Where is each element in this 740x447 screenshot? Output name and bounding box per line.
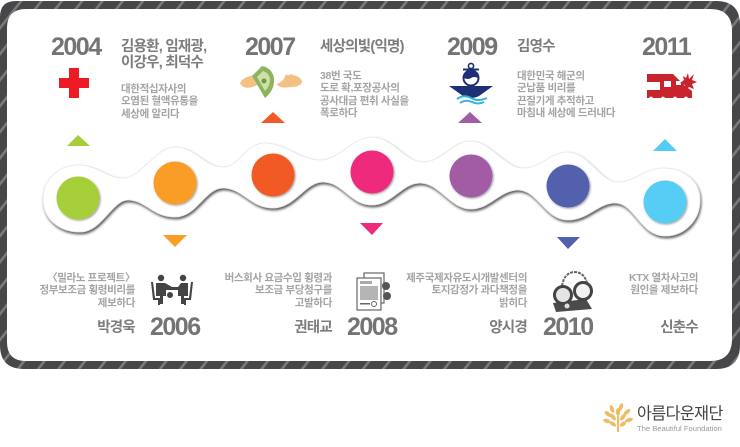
name 2010: 양시경	[489, 320, 527, 336]
name 2004	[121, 38, 206, 71]
description 2004: 오염된 혈액유통을	[121, 95, 198, 107]
description 2010: 토지감정가 과다책정을	[431, 284, 527, 296]
description 2006: 정부보조금 횡령비리를	[39, 284, 135, 296]
marker 2011	[653, 139, 677, 151]
description 2010: 제주국제자유도시개발센터의	[406, 272, 527, 284]
description 2006: 〈밀라노 프로젝트〉	[47, 272, 135, 284]
description 2007: 폭로하다	[320, 107, 357, 119]
description 2007: 공사대금 편취 사실을	[320, 95, 409, 107]
marker 2009	[458, 112, 482, 123]
marker 2006	[163, 235, 187, 247]
name 2007: 세상의빛(익명)	[320, 39, 404, 55]
year 2009: 2009	[447, 33, 497, 61]
year 2011: 2011	[642, 33, 690, 61]
icon: red cross	[59, 68, 89, 98]
marker 2008	[360, 223, 383, 235]
name 2004: 김용환, 임재광,	[121, 39, 206, 55]
description 2006: 제보하다	[98, 297, 135, 309]
circle 2010	[546, 164, 590, 208]
icon: navy anchor	[449, 63, 493, 104]
description 2008: 버스회사 요금수입 횡령과	[225, 272, 332, 284]
description 2004: 대한적십자사의	[121, 83, 186, 95]
description 2008: 보조금 부당청구를	[255, 284, 332, 296]
name 2004: 이강우, 최덕수	[121, 55, 203, 71]
name 2006: 박경욱	[97, 320, 135, 336]
description 2007: 도로 확,포장공사의	[320, 82, 400, 94]
year 2004: 2004	[51, 33, 101, 61]
description 2009: 군납품 비리를	[517, 82, 575, 94]
logo: foundation name: 아름다운재단	[637, 405, 723, 423]
year 2008: 2008	[347, 313, 397, 341]
name 2008: 권태교	[294, 320, 332, 336]
description 2004: 세상에 알리다	[121, 108, 179, 120]
marker 2004	[67, 135, 90, 146]
circle 2008	[350, 150, 394, 194]
description 2011	[629, 272, 698, 296]
description 2004	[121, 83, 198, 120]
marker 2010	[557, 237, 580, 249]
description 2010	[406, 272, 528, 309]
circle 2006	[154, 162, 196, 204]
description 2009: 마침내 세상에 드러내다	[517, 107, 615, 119]
circle 2009	[450, 154, 492, 198]
marker 2007	[261, 112, 285, 123]
wavy timeline band	[43, 137, 700, 236]
description 2007: 38번 국도	[320, 70, 361, 82]
icon: crashing train	[647, 73, 697, 98]
icon: documents with seals	[357, 273, 391, 310]
description 2011: 원인을 제보하다	[630, 284, 698, 296]
icon: money fan and hands	[240, 66, 302, 98]
circle 2007	[252, 154, 294, 196]
logo: english name: The Beautiful Foundation	[637, 424, 722, 433]
circle 2004	[56, 176, 100, 220]
description 2009: 대한민국 해군의	[517, 70, 585, 82]
description 2009	[517, 70, 616, 119]
description 2010: 밝히다	[499, 297, 527, 309]
name 2009: 김영수	[517, 39, 555, 55]
description 2011: KTX 열차사고의	[629, 272, 698, 284]
circle 2011	[644, 180, 686, 224]
logo: tree mark	[603, 403, 633, 432]
year 2006: 2006	[150, 313, 200, 341]
description 2009: 끈질기게 추적하고	[517, 95, 594, 107]
year 2007: 2007	[245, 33, 295, 61]
description 2008: 고발하다	[295, 297, 332, 309]
description 2006	[39, 272, 136, 309]
description 2008	[225, 272, 332, 309]
name 2011: 신춘수	[660, 320, 698, 336]
icon: meeting at table	[151, 275, 193, 305]
icon: handcuffs and cash	[553, 272, 592, 312]
year 2010: 2010	[543, 313, 593, 341]
description 2007	[320, 70, 409, 119]
